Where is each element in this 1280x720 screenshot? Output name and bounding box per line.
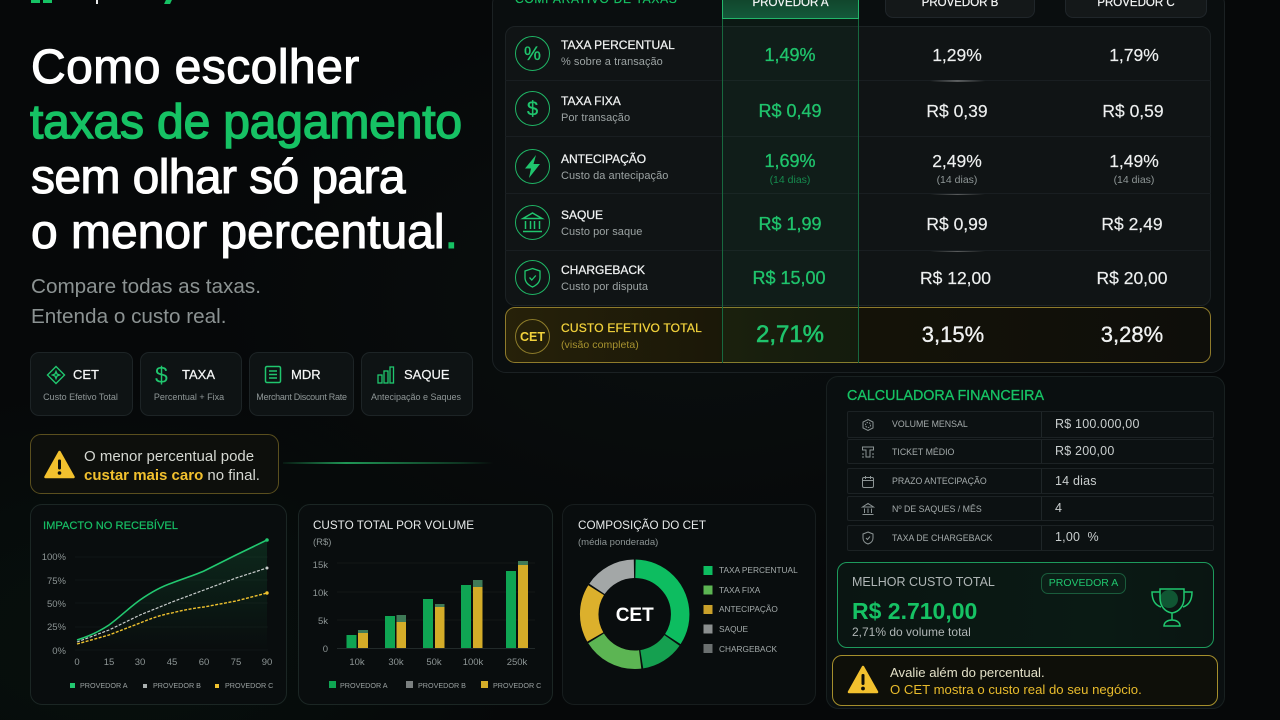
y axis labels: 0: [323, 644, 328, 655]
icon: shield: [862, 532, 874, 544]
row label: TAXA FIXA: [561, 94, 621, 108]
value C: 1,79%: [1109, 45, 1159, 65]
icon: dollar: $: [155, 362, 168, 388]
legend: PROVEDOR C: [225, 681, 273, 690]
chart subtitle: (média ponderada): [578, 537, 658, 548]
value B: 2,49%: [932, 151, 982, 171]
calculator heading: CALCULADORA FINANCEIRA: [847, 388, 1044, 404]
legend: PROVEDOR B: [153, 681, 201, 690]
x axis labels: 250k: [507, 657, 528, 668]
pill: provider A: [1041, 573, 1126, 594]
field: numero de saques: [847, 496, 1214, 521]
title: sem olhar só para: [31, 151, 405, 204]
callout: evaluate beyond percentual: [832, 655, 1218, 706]
field value: 1,00 %: [1055, 530, 1099, 544]
x axis labels: 30k: [388, 657, 404, 668]
header: provider C: [1065, 0, 1207, 18]
legend: PROVEDOR C: [493, 681, 541, 690]
card label: MELHOR CUSTO TOTAL: [852, 575, 995, 589]
field label: Nº DE SAQUES / MÊS: [892, 504, 982, 514]
legend: TAXA FIXA: [719, 585, 761, 595]
icon: lightning: [515, 149, 550, 184]
chip label: CET: [73, 367, 99, 382]
card description: 2,71% do volume total: [852, 624, 971, 638]
series: provider C: [77, 593, 267, 644]
row: taxa percentual: [505, 26, 1211, 81]
note B: (14 dias): [937, 174, 977, 186]
callout text: Avalie além do percentual.: [890, 664, 1045, 680]
logo (cropped at top edge): [31, 0, 172, 4]
value B: 1,29%: [932, 45, 982, 65]
field: ticket medio: [847, 439, 1214, 464]
icon: percent: [515, 36, 550, 71]
field: volume mensal: [847, 411, 1214, 438]
title: Como escolher: [31, 41, 360, 94]
legend: PROVEDOR A: [340, 681, 388, 690]
value C: R$ 20,00: [1096, 268, 1168, 288]
x axis labels: [349, 657, 528, 668]
subtitle: Compare todas as taxas.: [31, 275, 261, 298]
y axis labels: 50%: [47, 599, 67, 610]
icon: coin: [862, 419, 874, 431]
field label: TICKET MÉDIO: [892, 447, 954, 457]
row label: CUSTO EFETIVO TOTAL: [561, 321, 702, 335]
chip: TAXA: [140, 352, 242, 416]
x axis labels: 10k: [349, 657, 365, 668]
icon: shield: [515, 260, 550, 295]
x axis labels: 0: [74, 657, 80, 668]
chip: CET: [30, 352, 133, 416]
icon: diamond: [46, 366, 66, 384]
chip label: TAXA: [182, 367, 215, 382]
row label: CHARGEBACK: [561, 263, 645, 277]
field value: R$ 200,00: [1055, 444, 1114, 458]
icon: trophy: [1151, 588, 1193, 627]
field label: PRAZO ANTECIPAÇÃO: [892, 476, 987, 486]
row: antecipacao: [505, 137, 1211, 194]
legend: CHARGEBACK: [719, 644, 778, 654]
x axis labels: 15: [104, 657, 114, 668]
panel: table rows: [505, 26, 1211, 363]
icon: calendar: [862, 476, 874, 488]
subtitle: [31, 275, 261, 328]
callout: warning percentual: [30, 434, 279, 494]
bars: provider C: [358, 565, 528, 648]
icon: warning triangle: [848, 666, 878, 694]
x axis labels: 60: [199, 657, 209, 668]
icon: bank: [861, 503, 875, 515]
value C: R$ 0,59: [1102, 101, 1164, 121]
panel: total cost bar chart: [298, 504, 553, 705]
series: provider A: [77, 540, 267, 640]
chart title: CUSTO TOTAL POR VOLUME: [313, 520, 474, 532]
icon: bars: [377, 366, 394, 384]
x axis labels: 75: [231, 657, 241, 668]
donut chart: [589, 569, 680, 660]
row: taxa fixa: [505, 81, 1211, 137]
card: best total cost: [837, 562, 1214, 648]
y axis labels: 10k: [313, 588, 328, 599]
icon: ticket: [862, 446, 874, 458]
icon: list document: [264, 366, 282, 384]
icon: dollar: $: [527, 98, 538, 120]
legend: [329, 681, 541, 690]
icon: CET badge: CET: [520, 330, 545, 344]
row description: Custo por saque: [561, 226, 642, 238]
callout text: custar mais caro no final.: [84, 467, 260, 484]
chip description: Antecipação e Saques: [371, 392, 461, 402]
panel: financial calculator: [826, 376, 1225, 709]
field label: TAXA DE CHARGEBACK: [892, 533, 993, 543]
header: provider B: [885, 0, 1035, 18]
provider A column highlight: [722, 0, 859, 363]
y axis labels: 0%: [52, 646, 67, 657]
chip: MDR: [249, 352, 354, 416]
title: o menor percentual.: [31, 206, 458, 259]
chart title: COMPOSIÇÃO DO CET: [578, 519, 706, 532]
title: [30, 41, 462, 259]
value A: R$ 15,00: [752, 268, 826, 288]
legend: PROVEDOR A: [80, 681, 128, 690]
value A: R$ 0,49: [758, 101, 822, 121]
panel: impact line chart: [30, 504, 287, 705]
legend: [70, 681, 273, 690]
icon: percent: %: [524, 44, 541, 65]
row description: (visão completa): [561, 339, 639, 351]
y axis labels: 25%: [47, 622, 67, 633]
value A: 2,71%: [756, 321, 824, 348]
x axis labels: 90: [262, 657, 272, 668]
row label: SAQUE: [561, 208, 603, 222]
x axis labels: 100k: [463, 657, 484, 668]
row: custo efetivo total: [505, 307, 1211, 363]
field value: 14 dias: [1055, 474, 1097, 488]
row description: Por transação: [561, 112, 630, 124]
bars: provider B: [358, 561, 528, 648]
row description: % sobre a transação: [561, 56, 663, 68]
chip description: Merchant Discount Rate: [256, 392, 347, 402]
chip description: Percentual + Fixa: [154, 392, 224, 402]
value A: R$ 1,99: [758, 214, 822, 234]
row label: ANTECIPAÇÃO: [561, 152, 646, 166]
x axis labels: [74, 657, 272, 668]
y axis labels: [313, 560, 328, 655]
icon: dollar: [515, 91, 550, 126]
value B: R$ 0,39: [926, 101, 988, 121]
header: provider A: [722, 0, 859, 19]
legend: ANTECIPAÇÃO: [719, 604, 778, 614]
x axis labels: 45: [167, 657, 177, 668]
legend: TAXA PERCENTUAL: [719, 565, 798, 575]
callout text: [890, 664, 1142, 697]
row: chargeback: [515, 260, 1168, 295]
field value: 4: [1055, 501, 1062, 515]
value B: R$ 12,00: [920, 268, 991, 288]
legend: SAQUE: [719, 624, 749, 634]
chip: SAQUE: [361, 352, 473, 416]
note A: (14 dias): [770, 174, 810, 186]
row description: Custo da antecipação: [561, 170, 668, 182]
chart subtitle: (R$): [313, 537, 331, 548]
value A: 1,69%: [764, 151, 816, 171]
note C: (14 dias): [1114, 174, 1154, 186]
y axis labels: 15k: [313, 560, 328, 571]
row label: TAXA PERCENTUAL: [561, 38, 675, 52]
chip label: SAQUE: [404, 367, 450, 382]
callout text: [84, 448, 260, 484]
callout text: O CET mostra o custo real do seu negócio.: [890, 682, 1142, 697]
pill: provider A: PROVEDOR A: [1049, 577, 1118, 589]
legend: [704, 565, 798, 654]
chart title: IMPACTO NO RECEBÍVEL: [43, 519, 178, 532]
field: taxa de chargeback: [847, 525, 1214, 551]
row description: Custo por disputa: [561, 281, 648, 293]
icon: bank: [515, 205, 550, 240]
title: taxas de pagamento: [30, 96, 462, 149]
donut center label: CET: [616, 605, 654, 626]
y axis labels: 75%: [47, 576, 67, 587]
x axis labels: 30: [135, 657, 145, 668]
value C: R$ 2,49: [1101, 214, 1163, 234]
subtitle: Entenda o custo real.: [31, 305, 227, 328]
icon: warning triangle: [44, 450, 75, 478]
y axis labels: 5k: [318, 616, 328, 627]
x axis labels: 50k: [426, 657, 442, 668]
callout text: O menor percentual pode: [84, 448, 254, 465]
chip label: MDR: [291, 367, 321, 382]
panel: comparison table: [492, 0, 1225, 373]
series: provider B: [77, 568, 267, 642]
legend: PROVEDOR B: [418, 681, 466, 690]
row: saque: [505, 194, 1211, 251]
value A: 1,49%: [764, 45, 816, 65]
chip description: Custo Efetivo Total: [43, 392, 118, 402]
value C: 3,28%: [1101, 322, 1163, 347]
panel: CET composition donut: [562, 504, 816, 705]
value B: R$ 0,99: [926, 214, 988, 234]
value C: 1,49%: [1109, 151, 1159, 171]
icon: CET badge: [515, 319, 550, 354]
y axis labels: [42, 552, 67, 657]
y axis labels: 100%: [42, 552, 67, 563]
field: prazo antecipacao: [847, 468, 1214, 494]
bars: provider A: [346, 571, 516, 648]
field label: VOLUME MENSAL: [892, 419, 968, 429]
value B: 3,15%: [922, 322, 984, 347]
field value: R$ 100.000,00: [1055, 417, 1140, 431]
amount: R$ 2.710,00: [852, 598, 977, 624]
